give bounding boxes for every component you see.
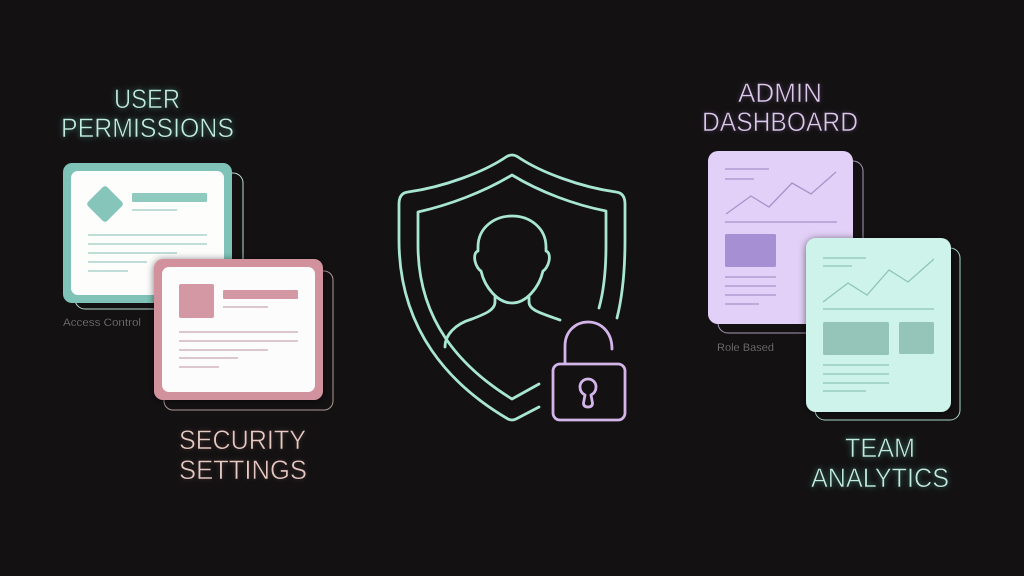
heading: admin dashboard: ADMIN <box>738 78 822 108</box>
heading: security settings: SETTINGS <box>179 455 307 485</box>
padlock <box>553 322 625 420</box>
shield outer outline <box>399 155 625 420</box>
panel: admin dashboard <box>702 78 863 354</box>
heading: admin dashboard <box>702 78 858 137</box>
heading: admin dashboard: DASHBOARD <box>702 107 858 137</box>
card: admin dashboard <box>708 151 853 324</box>
icon: shield with user and open lock <box>399 155 625 420</box>
card: user permissions <box>63 163 232 303</box>
heading: user permissions: PERMISSIONS <box>61 113 234 143</box>
heading: team analytics <box>811 433 949 493</box>
heading: team analytics: ANALYTICS <box>811 463 949 493</box>
heading: team analytics: TEAM <box>845 433 915 463</box>
heading: user permissions <box>61 84 234 143</box>
card: security settings <box>154 259 323 400</box>
heading: security settings <box>179 425 307 485</box>
panel: team analytics <box>806 238 960 493</box>
card: team analytics <box>806 238 951 412</box>
shield inner outline <box>418 175 606 399</box>
heading: user permissions: USER <box>114 84 180 114</box>
card outline: user permissions <box>75 173 243 309</box>
panel: user permissions <box>61 84 243 329</box>
user head <box>475 216 549 303</box>
card outline: security settings <box>164 271 333 410</box>
caption: role based: Role Based <box>717 342 774 354</box>
panel: security settings <box>154 259 333 485</box>
card outline: team analytics <box>815 248 960 420</box>
heading: security settings: SECURITY <box>179 425 306 455</box>
caption: access control: Access Control <box>63 317 141 329</box>
user shoulders <box>445 297 560 347</box>
card outline: admin dashboard <box>718 161 863 333</box>
